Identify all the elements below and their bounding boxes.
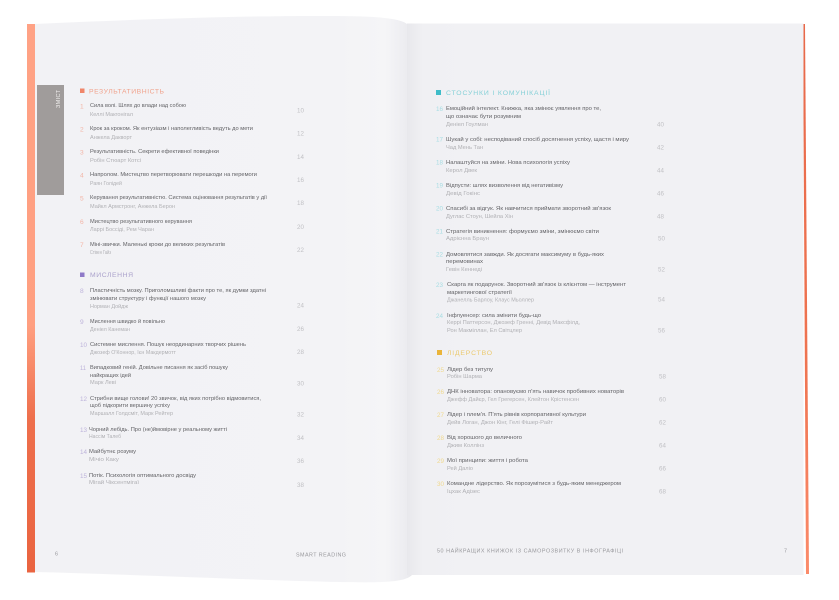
entry 14 xyxy=(80,448,304,465)
entry 7: 22 xyxy=(297,247,304,254)
entry 10 xyxy=(80,342,304,356)
entry 2: Крок за кроком. Як ентузіазм і наполегливість ведуть до мети xyxy=(90,126,253,132)
entry 17 xyxy=(436,136,664,152)
entry 15: Мігай Чіксентмігаї xyxy=(89,479,140,486)
entry 29: 29 xyxy=(437,458,444,465)
heading: стосунки і комунікації: СТОСУНКИ І КОМУНІКАЦІЇ xyxy=(446,89,550,97)
entry 19: 19 xyxy=(436,182,443,190)
entry 16: Емоційний інтелект. Книжка, яка змінює уявлення про те, xyxy=(446,105,602,112)
entry 20: Спасибі за відгук. Як навчитися приймати зворотний зв'язок xyxy=(446,205,612,212)
entry 18 xyxy=(436,159,664,174)
entry 20: Дуглас Стоун, Шейла Хін xyxy=(446,213,513,220)
entry 23: 23 xyxy=(436,282,443,289)
entry 6: Ларрі Боссіді, Рем Чаран xyxy=(90,227,154,233)
left page number: 6 xyxy=(55,552,58,558)
entry 16: 16 xyxy=(436,106,443,113)
entry 11: найкращих ідей xyxy=(90,372,131,379)
entry 24: Керрі Паттерсон, Джозеф Гренні, Девід Максфілд, xyxy=(447,320,580,326)
entry 22: перемовинах xyxy=(446,259,483,265)
entry 8: 24 xyxy=(297,302,304,310)
entry 20: 48 xyxy=(657,214,664,220)
entry 5: 18 xyxy=(297,200,304,207)
heading: мислення: МИСЛЕННЯ xyxy=(90,272,133,279)
entry 26 xyxy=(437,389,666,404)
entry 28: 28 xyxy=(437,435,444,442)
entry 27: Дейв Логан, Джон Кінг, Гелі Фішер-Райт xyxy=(447,419,553,426)
entry 5: Майкл Армстронг, Анжела Берон xyxy=(90,203,175,210)
entry 2: 12 xyxy=(297,130,304,138)
entry 19: Девід Гокінс xyxy=(446,191,480,197)
entry 29: 66 xyxy=(659,466,666,472)
entry 24: Інфлуенсер: сила змінити будь-що xyxy=(447,313,541,319)
entry 5: 5 xyxy=(80,196,84,202)
entry 11: 11 xyxy=(80,365,86,372)
entry 16 xyxy=(436,105,664,128)
entry 9 xyxy=(80,318,304,333)
entry 22: 22 xyxy=(436,252,443,258)
entry 23: Скарга як подарунок. Зворотний зв'язок із клієнтом — інструмент xyxy=(447,281,627,288)
entry 11 xyxy=(80,364,304,388)
entry 1: 10 xyxy=(297,108,304,114)
entry 3: Результативність. Секрети ефективної поведінки xyxy=(90,149,219,155)
entry 24 xyxy=(436,313,665,334)
entry 5: Керування результативністю. Система оцінювання результатів у дії xyxy=(90,195,267,201)
entry 24: 24 xyxy=(436,313,443,320)
entry 16: що означає бути розумним xyxy=(446,114,521,120)
entry 8: Норман Дойдж xyxy=(90,303,128,310)
entry 9: 9 xyxy=(80,319,84,326)
contents tab: ЗМІСТ xyxy=(56,89,62,108)
entry 24: Рон Макміллан, Ел Світцлер xyxy=(447,328,522,334)
entry 28: Від хорошого до величного xyxy=(447,435,522,441)
entry 3: 3 xyxy=(80,150,84,156)
entry 10: Джозеф О'Коннор, Ієн Макдермотт xyxy=(90,350,176,356)
entry 18: Налаштуйся на зміни. Нова психологія успіху xyxy=(446,159,570,166)
left page xyxy=(35,16,412,582)
entry 22: 52 xyxy=(658,266,665,274)
heading: результативність: РЕЗУЛЬТАТИВНІСТЬ xyxy=(89,88,165,96)
entry 29 xyxy=(437,458,666,472)
entry 28 xyxy=(437,435,666,450)
entry 26: 60 xyxy=(659,396,666,404)
entry 16: 40 xyxy=(657,122,664,128)
entry 17: Шукай у собі: несподіваний спосіб досягнення успіху, щастя і миру xyxy=(446,136,629,143)
entry 21: 50 xyxy=(658,236,665,242)
entry 30: 68 xyxy=(659,488,666,496)
entry 25: 25 xyxy=(437,367,444,374)
entry 21 xyxy=(436,228,665,242)
entry 14: Майбутнє розуму xyxy=(89,448,136,455)
entry 30: Іцхак Адізес xyxy=(447,489,480,495)
section: результативність xyxy=(80,88,304,256)
entry 4: Напролом. Мистецтво перетворювати перешкоди на перемоги xyxy=(90,172,257,178)
contents tab xyxy=(37,85,64,195)
entry 12: Стрибни вище голови! 20 звичок, від яких потрібно відмовитися, xyxy=(90,396,261,402)
entry 30: 30 xyxy=(437,481,444,488)
entry 2 xyxy=(80,126,304,141)
entry 8: змінювати структуру і функції нашого мозку xyxy=(90,296,206,302)
entry 29: Мої принципи: життя і робота xyxy=(447,458,529,464)
entry 29: Рей Даліо xyxy=(447,465,473,472)
entry 18: 44 xyxy=(657,168,664,174)
entry 25: Лідер без титулу xyxy=(447,367,493,373)
entry 6 xyxy=(80,219,304,233)
entry 27 xyxy=(437,412,666,426)
entry 16: Деніел Гоулман xyxy=(446,122,488,128)
entry 4: 16 xyxy=(297,177,304,184)
entry 9: Мислення швидко й повільно xyxy=(90,318,165,325)
entry 17: 17 xyxy=(436,136,443,144)
entry 27: Лідер і плем'я. П'ять рівнів корпоративної культури xyxy=(447,412,586,418)
right orange edge xyxy=(803,24,809,574)
entry 15: 15 xyxy=(80,473,87,480)
entry 7: 7 xyxy=(80,242,84,249)
entry 15 xyxy=(80,473,304,489)
entry 30: Командне лідерство. Як порозумітися з будь-яким менеджером xyxy=(447,481,621,487)
entry 3 xyxy=(80,149,304,164)
entry 9: Деніел Канеман xyxy=(90,327,130,333)
entry 11: Випадковий геній. Довільне писання як засіб пошуку xyxy=(90,364,228,371)
entry 12: щоб підкорити вершину успіху xyxy=(90,403,170,409)
entry 19: 46 xyxy=(657,190,664,198)
entry 9: 26 xyxy=(297,326,304,333)
entry 18: Керол Двек xyxy=(446,168,478,174)
entry 28: Джим Коллінз xyxy=(447,443,484,449)
entry 13: 34 xyxy=(297,435,304,442)
entry 18: 18 xyxy=(436,160,443,166)
entry 12: Маршалл Голдсміт, Марк Рейтер xyxy=(90,410,173,417)
entry 14: Мічіо Каку xyxy=(89,457,119,463)
entry 21: 21 xyxy=(436,228,443,236)
left orange edge xyxy=(27,24,35,572)
entry 10: 28 xyxy=(297,349,304,356)
entry 24: 56 xyxy=(658,328,665,334)
entry 1 xyxy=(80,103,304,118)
entry 3: Робін Стюарт Котсі xyxy=(90,158,141,164)
entry 6: Мистецтво результативного керування xyxy=(90,219,192,225)
right page number: 7 xyxy=(784,548,787,554)
entry 25 xyxy=(437,367,666,380)
entry 30 xyxy=(437,481,666,496)
entry 4: 4 xyxy=(80,172,84,180)
entry 8: Пластичність мозку. Приголомшливі факти про те, як думки здатні xyxy=(90,288,266,294)
entry 2: Анжела Дакворт xyxy=(90,135,132,141)
entry 15: Потік. Психологія оптимального досвіду xyxy=(89,473,196,479)
entry 7: Міні-звички. Маленькі кроки до великих результатів xyxy=(90,242,225,248)
entry 13: Нассім Талеб xyxy=(89,434,121,440)
entry 13: Чорний лебідь. Про (не)ймовірне у реальному житті xyxy=(89,426,227,433)
entry 12: 12 xyxy=(80,396,87,403)
entry 21: Адрієнна Браун xyxy=(446,236,489,242)
entry 26: Джефф Дайєр, Гел Грегерсен, Клейтон Крістенсен xyxy=(447,396,579,403)
entry 6: 20 xyxy=(297,224,304,231)
entry 25: 58 xyxy=(659,374,666,380)
entry 6: 6 xyxy=(80,219,84,226)
entry 14: 36 xyxy=(297,458,304,465)
section: лідерство xyxy=(437,350,666,496)
entry 14: 14 xyxy=(80,449,87,456)
entry 3: 14 xyxy=(297,154,304,161)
section: мислення xyxy=(80,272,304,489)
entry 2: 2 xyxy=(80,126,84,134)
entry 21: Стратегія виникнення: формуємо зміни, змінюємо світи xyxy=(446,229,599,235)
entry 4: Раян Голідей xyxy=(90,180,122,187)
entry 7: Стівен Гайз xyxy=(90,249,111,256)
entry 12 xyxy=(80,396,304,418)
entry 1: Сила волі. Шлях до влади над собою xyxy=(90,103,186,109)
section: стосунки і комунікації xyxy=(436,89,665,334)
entry 23: 54 xyxy=(658,296,665,304)
entry 26: ДНК інноватора: опановуємо п'ять навичок пробивних новаторів xyxy=(447,389,624,395)
entry 17: 42 xyxy=(657,144,664,152)
entry 20 xyxy=(436,205,664,220)
left running footer: SMART READING xyxy=(296,552,346,558)
entry 4 xyxy=(80,172,304,187)
heading: лідерство: ЛІДЕРСТВО xyxy=(447,350,492,357)
entry 22: Домовлятися завжди. Як досягати максимуму в будь-яких xyxy=(446,252,604,258)
right running footer: 50 НАЙКРАЩИХ КНИЖОК ІЗ САМОРОЗВИТКУ В ІНФОГРАФІЦІ xyxy=(437,546,623,554)
entry 13 xyxy=(80,426,304,442)
entry 22 xyxy=(436,252,665,274)
entry 27: 27 xyxy=(437,412,444,419)
entry 10: 10 xyxy=(80,342,87,349)
entry 23: маркетингової стратегії xyxy=(447,290,513,296)
entry 27: 62 xyxy=(659,420,666,426)
entry 19 xyxy=(436,182,664,198)
entry 26: 26 xyxy=(437,389,444,396)
entry 15: 38 xyxy=(297,482,304,489)
entry 25: Робін Шарма xyxy=(447,374,483,380)
entry 23: Джанелль Барлоу, Клаус Мьоллер xyxy=(447,298,534,304)
entry 5 xyxy=(80,195,304,210)
entry 12: 32 xyxy=(297,412,304,418)
right page xyxy=(407,24,804,575)
entry 11: 30 xyxy=(297,380,304,388)
entry 8: 8 xyxy=(80,288,84,295)
entry 10: Системне мислення. Пошук неординарних творчих рішень xyxy=(90,342,246,348)
entry 1: 1 xyxy=(80,104,84,110)
entry 17: Чад Мень Тан xyxy=(446,145,483,151)
entry 19: Відпусти: шлях визволення від негативізму xyxy=(446,183,563,189)
entry 23 xyxy=(436,281,665,304)
entry 11: Марк Леві xyxy=(90,380,116,386)
entry 20: 20 xyxy=(436,206,443,212)
entry 1: Келлі Макгонігал xyxy=(90,112,133,118)
entry 13: 13 xyxy=(80,427,87,434)
entry 28: 64 xyxy=(659,442,666,450)
entry 8 xyxy=(80,288,304,310)
entry 7 xyxy=(80,242,304,256)
entry 22: Гевін Кеннеді xyxy=(446,267,482,273)
